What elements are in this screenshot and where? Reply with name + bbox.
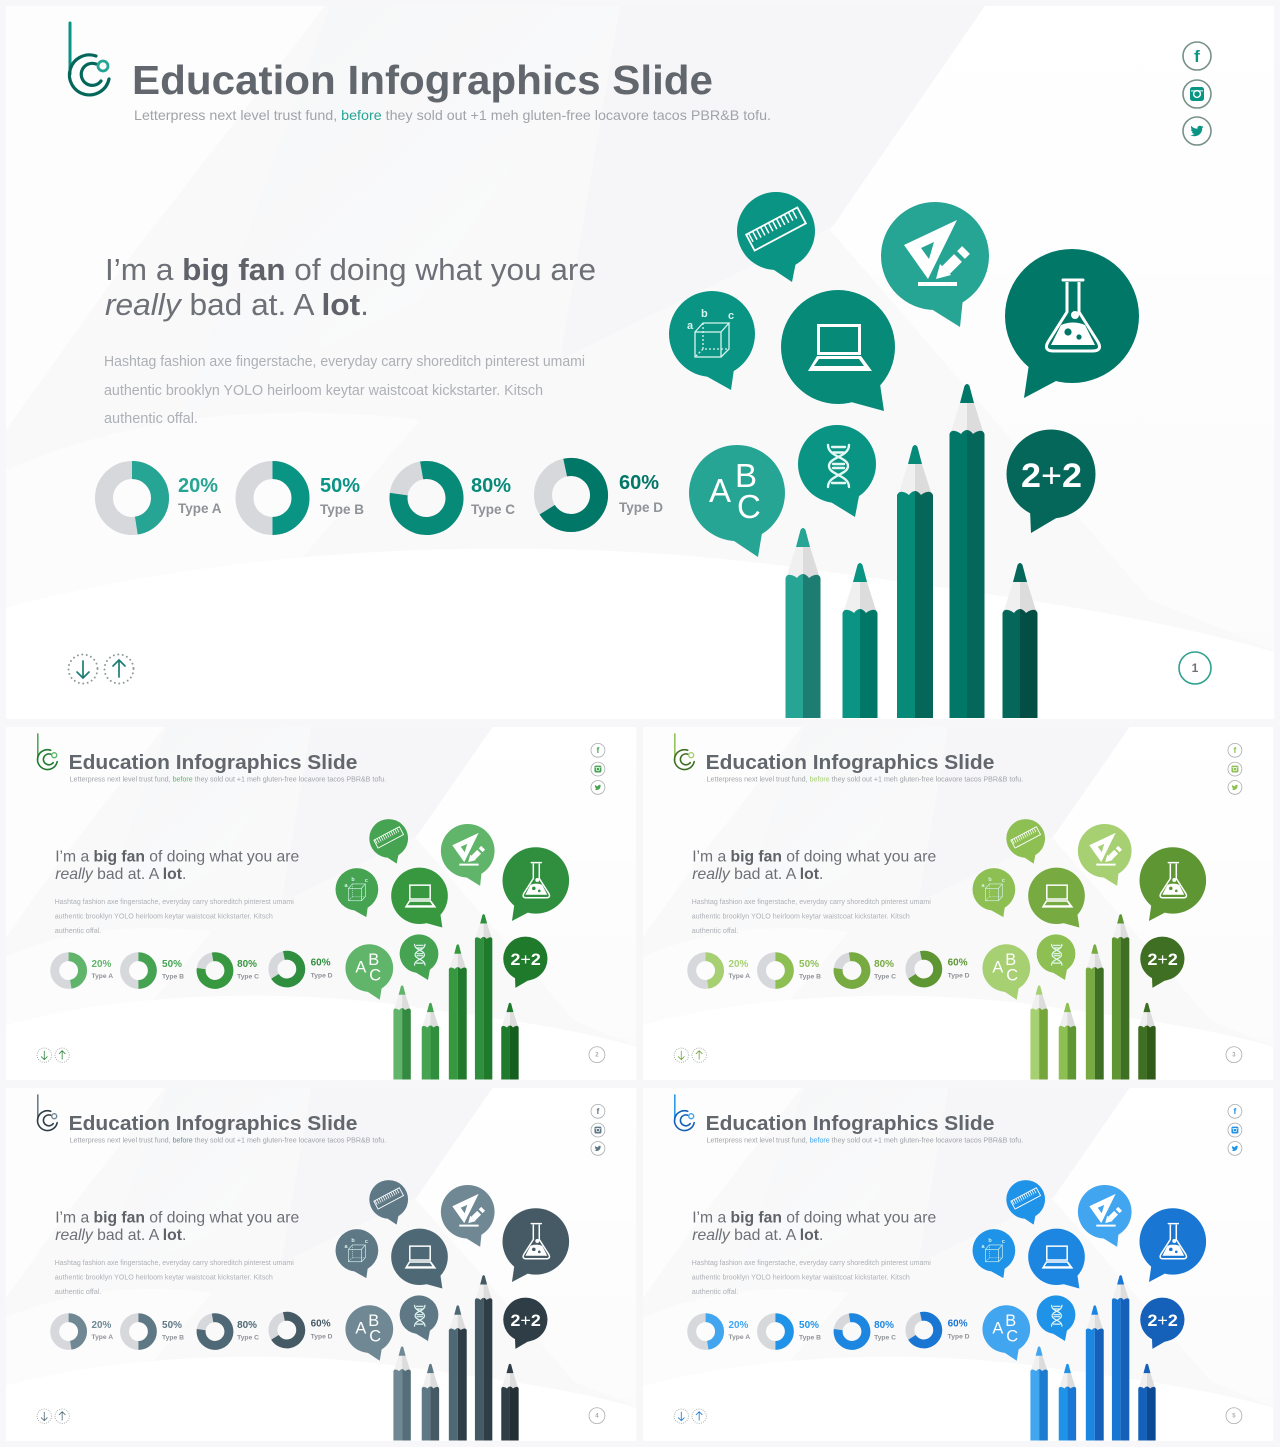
headline line 2: really bad at. A lot. [105, 287, 369, 322]
body paragraph: Hashtag fashion axe fingerstache, everyday carry shoreditch pinterest umami [55, 897, 294, 906]
logo [38, 734, 57, 770]
bubble: ABC [982, 944, 1030, 1000]
body paragraph: authentic brooklyn YOLO heirloom keytar waistcoat kickstarter. Kitsch [104, 383, 543, 399]
bubble: cube: c [728, 310, 734, 322]
bubble: set square [1078, 824, 1132, 886]
bubble: cube: a [981, 1244, 985, 1250]
donut: type A: Type A [91, 1334, 113, 1341]
donut: type C: Type C [874, 1334, 896, 1341]
slide background [6, 727, 636, 1080]
page number: 4 [595, 1414, 599, 1420]
page number: 3 [1232, 1053, 1236, 1059]
donut: type A: Type A [91, 973, 113, 980]
social icons: f [597, 1106, 600, 1116]
body paragraph: authentic offal. [55, 926, 101, 935]
donut: type D: Type D [311, 972, 333, 979]
slide 1: teal [6, 6, 1274, 719]
donut: type C: Type C [471, 502, 515, 517]
bubble: flask [503, 847, 569, 921]
title: Education Infographics Slide [706, 1113, 994, 1135]
pencil 4 [475, 1275, 492, 1440]
slide background [6, 6, 1274, 719]
title: Education Infographics Slide [706, 752, 994, 774]
page number [1226, 1408, 1242, 1424]
bubble: ruler [1006, 819, 1045, 864]
bubble: flask [503, 1208, 569, 1282]
bubble: DNA [400, 934, 438, 980]
headline: I’m a big fan of doing what you are [692, 1210, 936, 1227]
bubble: cube: b [988, 877, 992, 883]
donut: type B: Type B [799, 973, 821, 980]
social icons: f [1234, 1106, 1237, 1116]
bubble: cube: b [351, 877, 355, 883]
donut: type C [836, 954, 896, 987]
donut: type A [692, 957, 750, 984]
body paragraph: Hashtag fashion axe fingerstache, everyday carry shoreditch pinterest umami [692, 897, 931, 906]
bubble: laptop [1028, 1229, 1085, 1288]
bubble: flask [1140, 847, 1206, 921]
donut: type C: 80% [874, 959, 894, 970]
body paragraph: Hashtag fashion axe fingerstache, everyday carry shoreditch pinterest umami [104, 354, 585, 370]
bubble: laptop [391, 1229, 448, 1288]
donut: type D [270, 1314, 333, 1346]
bubble: cube: a [344, 883, 348, 889]
body paragraph [55, 1258, 294, 1296]
subtitle: Letterpress next level trust fund, before they sold out +1 meh gluten-free locavore tacos PBR&B tofu. [70, 776, 386, 783]
body paragraph: authentic offal. [55, 1287, 101, 1296]
donut: type D: 60% [948, 1319, 968, 1330]
donut: type D: Type D [311, 1333, 333, 1340]
donut: type C: 80% [471, 475, 511, 497]
donut: type A: 20% [178, 475, 218, 497]
headline line 2: really bad at. A lot. [692, 866, 823, 883]
bubble: ABC: A [355, 959, 366, 977]
bubble: cube: c [365, 878, 368, 884]
bubble: DNA [1037, 934, 1075, 980]
donut: type A: 20% [728, 1320, 749, 1331]
donut: type C: Type C [237, 1334, 259, 1341]
bubble: laptop [391, 868, 448, 927]
bubble: DNA [400, 1295, 438, 1341]
bubble: ruler [369, 1180, 408, 1225]
pencil 5 [1138, 1364, 1156, 1440]
social icons: f [1234, 745, 1237, 755]
donut: type A: 20% [728, 959, 749, 970]
body paragraph: Hashtag fashion axe fingerstache, everyday carry shoreditch pinterest umami [692, 1258, 931, 1267]
donut: type C: 80% [237, 1320, 257, 1331]
bubble: 2+2 [1140, 1298, 1184, 1349]
bubble: ABC: C [369, 966, 381, 984]
donut: type B: 50% [162, 1320, 182, 1331]
bubble: ABC: A [709, 472, 731, 509]
bubble: cube: b [701, 308, 708, 320]
subtitle: Letterpress next level trust fund, before they sold out +1 meh gluten-free locavore tacos PBR&B tofu. [707, 776, 1023, 783]
social icons [1183, 42, 1211, 145]
donut: type C: 80% [237, 959, 257, 970]
body paragraph: authentic offal. [104, 411, 198, 427]
logo [675, 734, 694, 770]
bubble: 2+2: 2+2 [1147, 950, 1178, 969]
bubble: set square [881, 202, 989, 327]
social icons [1228, 743, 1242, 794]
social icons [591, 1104, 605, 1155]
bubble: laptop [781, 290, 895, 411]
page number [589, 1408, 605, 1424]
bubble: ABC: C [369, 1327, 381, 1345]
subtitle: Letterpress next level trust fund, before they sold out +1 meh gluten-free locavore tacos PBR&B tofu. [707, 1137, 1023, 1144]
logo [675, 1095, 694, 1131]
body paragraph [692, 1258, 931, 1296]
bubble: cube [336, 1229, 378, 1278]
slide 4: slate [6, 1088, 636, 1441]
donut: type A: Type A [178, 501, 222, 516]
donut: type D: 60% [311, 1319, 331, 1330]
bubble: DNA [798, 425, 876, 517]
headline line 2: really bad at. A lot. [55, 866, 186, 883]
bubble: set square [1078, 1185, 1132, 1247]
subtitle: Letterpress next level trust fund, before they sold out +1 meh gluten-free locavore tacos PBR&B tofu. [70, 1137, 386, 1144]
bubble: ABC [689, 445, 785, 557]
title: Education Infographics Slide [132, 57, 713, 103]
pencil 3 [1086, 1305, 1104, 1440]
pencil 1 [1030, 1346, 1048, 1440]
bubble: cube: b [351, 1238, 355, 1244]
body paragraph: Hashtag fashion axe fingerstache, everyday carry shoreditch pinterest umami [55, 1258, 294, 1267]
navigation arrows [674, 1409, 706, 1423]
donut: type D [270, 953, 333, 985]
bubble: ABC [345, 1305, 393, 1361]
bubble: ABC: B [1005, 951, 1016, 969]
slide 3: lime [643, 727, 1273, 1080]
page number [1226, 1047, 1242, 1063]
headline: I’m a big fan of doing what you are [692, 849, 936, 866]
pencil 2 [422, 1003, 439, 1079]
donut: type C [394, 466, 515, 530]
slide background [643, 1088, 1273, 1441]
slide background [643, 727, 1273, 1080]
donut: type C [199, 954, 259, 987]
pencil 4 [950, 384, 984, 718]
donut: type D: Type D [619, 500, 663, 515]
body paragraph: authentic offal. [692, 1287, 738, 1296]
donut: type A [55, 1318, 113, 1345]
donut: type D [538, 462, 663, 528]
bubble: ABC [345, 944, 393, 1000]
donut: type C: 80% [874, 1320, 894, 1331]
logo [69, 23, 109, 95]
bubble: DNA [1037, 1295, 1075, 1341]
bubble: ABC: C [737, 488, 761, 525]
donut: type A: 20% [91, 959, 112, 970]
pencil 4 [1112, 914, 1129, 1079]
donut: type B: 50% [799, 959, 819, 970]
donut: type C [199, 1315, 259, 1348]
pencil 5 [501, 1364, 519, 1440]
bubble: ABC: C [1006, 966, 1018, 984]
bubble: flask [1005, 249, 1139, 398]
page number: 1 [1192, 661, 1199, 675]
pencil 2 [422, 1364, 439, 1440]
page number [589, 1047, 605, 1063]
donut: type B: Type B [799, 1334, 821, 1341]
bubble: cube [669, 291, 755, 390]
bubble: cube [973, 868, 1015, 917]
bubble: cube: a [344, 1244, 348, 1250]
donut: type B: Type B [162, 973, 184, 980]
pencil 1 [393, 985, 411, 1079]
title: Education Infographics Slide [69, 1113, 357, 1135]
logo [38, 1095, 57, 1131]
subtitle: Letterpress next level trust fund, before they sold out +1 meh gluten-free locavore tacos PBR&B tofu. [134, 107, 771, 123]
bubble: ABC: A [992, 959, 1003, 977]
page number [1179, 652, 1211, 684]
donut: type C: Type C [874, 973, 896, 980]
body paragraph [692, 897, 931, 935]
social icons: f [597, 745, 600, 755]
bubble: 2+2: 2+2 [1021, 457, 1082, 495]
pencil 5 [1138, 1003, 1156, 1079]
donut: type A: Type A [728, 1334, 750, 1341]
page number: 2 [595, 1053, 599, 1059]
bubble: 2+2 [1140, 937, 1184, 988]
donut: type D: 60% [311, 958, 331, 969]
bubble: 2+2 [503, 937, 547, 988]
headline: I’m a big fan of doing what you are [55, 849, 299, 866]
bubble: laptop [1028, 868, 1085, 927]
pencil 2 [1059, 1364, 1076, 1440]
bubble: 2+2: 2+2 [1147, 1311, 1178, 1330]
headline: I’m a big fan of doing what you are [105, 252, 596, 287]
donut: type D: 60% [948, 958, 968, 969]
bubble: cube: a [687, 320, 694, 332]
pencil 3 [449, 944, 467, 1079]
body paragraph: authentic brooklyn YOLO heirloom keytar waistcoat kickstarter. Kitsch [692, 1273, 910, 1282]
bubble: ABC [982, 1305, 1030, 1361]
social icons [1228, 1104, 1242, 1155]
pencil 2 [842, 563, 878, 718]
bubble: flask [1140, 1208, 1206, 1282]
donut: type A: 20% [91, 1320, 112, 1331]
social icons: f [1194, 47, 1200, 66]
bubble: ABC: B [368, 951, 379, 969]
pencil 2 [1059, 1003, 1076, 1079]
navigation arrows [37, 1409, 69, 1423]
pencil 3 [897, 445, 933, 718]
body paragraph: authentic brooklyn YOLO heirloom keytar waistcoat kickstarter. Kitsch [692, 912, 910, 921]
bubble: ruler [1006, 1180, 1045, 1225]
donut: type B [762, 957, 821, 984]
donut: type D: 60% [619, 472, 659, 494]
bubble: 2+2 [503, 1298, 547, 1349]
donut: type B [125, 1318, 184, 1345]
bubble: cube [973, 1229, 1015, 1278]
bubble: ABC: B [368, 1312, 379, 1330]
donut: type C [836, 1315, 896, 1348]
pencil 3 [1086, 944, 1104, 1079]
pencil 3 [449, 1305, 467, 1440]
donut: type B [762, 1318, 821, 1345]
pencil 1 [1030, 985, 1048, 1079]
slide background [6, 1088, 636, 1441]
bubble: ABC: A [992, 1320, 1003, 1338]
bubble: cube: c [1002, 1239, 1005, 1245]
bubble: set square [441, 824, 495, 886]
donut: type B: 50% [162, 959, 182, 970]
navigation arrows [68, 654, 134, 684]
bubble: 2+2 [1006, 430, 1096, 533]
body paragraph [104, 354, 585, 427]
donut: type D: Type D [948, 972, 970, 979]
pencil 5 [501, 1003, 519, 1079]
donut: type D [907, 953, 970, 985]
donut: type C: Type C [237, 973, 259, 980]
body paragraph: authentic offal. [692, 926, 738, 935]
bubble: cube: b [988, 1238, 992, 1244]
donut: type D: Type D [948, 1333, 970, 1340]
pencil 1 [393, 1346, 411, 1440]
navigation arrows [37, 1048, 69, 1062]
body paragraph [55, 897, 294, 935]
bubble: ABC: A [355, 1320, 366, 1338]
bubble: ruler [369, 819, 408, 864]
donut: type B: Type B [162, 1334, 184, 1341]
bubble: cube: c [365, 1239, 368, 1245]
title: Education Infographics Slide [69, 752, 357, 774]
donut: type A [55, 957, 113, 984]
headline: I’m a big fan of doing what you are [55, 1210, 299, 1227]
bubble: 2+2: 2+2 [510, 950, 541, 969]
bubble: ABC: B [735, 457, 757, 494]
bubble: set square [441, 1185, 495, 1247]
donut: type B [125, 957, 184, 984]
bubble: ABC: C [1006, 1327, 1018, 1345]
social icons [591, 743, 605, 794]
bubble: ruler [737, 192, 815, 282]
navigation arrows [674, 1048, 706, 1062]
slide 5: blue [643, 1088, 1273, 1441]
donut: type B [244, 470, 364, 526]
pencil 4 [1112, 1275, 1129, 1440]
bubble: cube: c [1002, 878, 1005, 884]
bubble: cube: a [981, 883, 985, 889]
donut: type D [907, 1314, 970, 1346]
bubble: 2+2: 2+2 [510, 1311, 541, 1330]
donut: type A: Type A [728, 973, 750, 980]
pencil 4 [475, 914, 492, 1079]
body paragraph: authentic brooklyn YOLO heirloom keytar waistcoat kickstarter. Kitsch [55, 912, 273, 921]
bubble: ABC: B [1005, 1312, 1016, 1330]
donut: type B: Type B [320, 502, 364, 517]
slide 2: green [6, 727, 636, 1080]
headline line 2: really bad at. A lot. [692, 1227, 823, 1244]
body paragraph: authentic brooklyn YOLO heirloom keytar waistcoat kickstarter. Kitsch [55, 1273, 273, 1282]
pencil 1 [786, 528, 820, 718]
page number: 5 [1232, 1414, 1236, 1420]
donut: type A [104, 470, 222, 526]
donut: type A [692, 1318, 750, 1345]
bubble: cube [336, 868, 378, 917]
headline line 2: really bad at. A lot. [55, 1227, 186, 1244]
donut: type B: 50% [320, 475, 360, 497]
donut: type B: 50% [799, 1320, 819, 1331]
pencil 5 [1002, 563, 1038, 718]
